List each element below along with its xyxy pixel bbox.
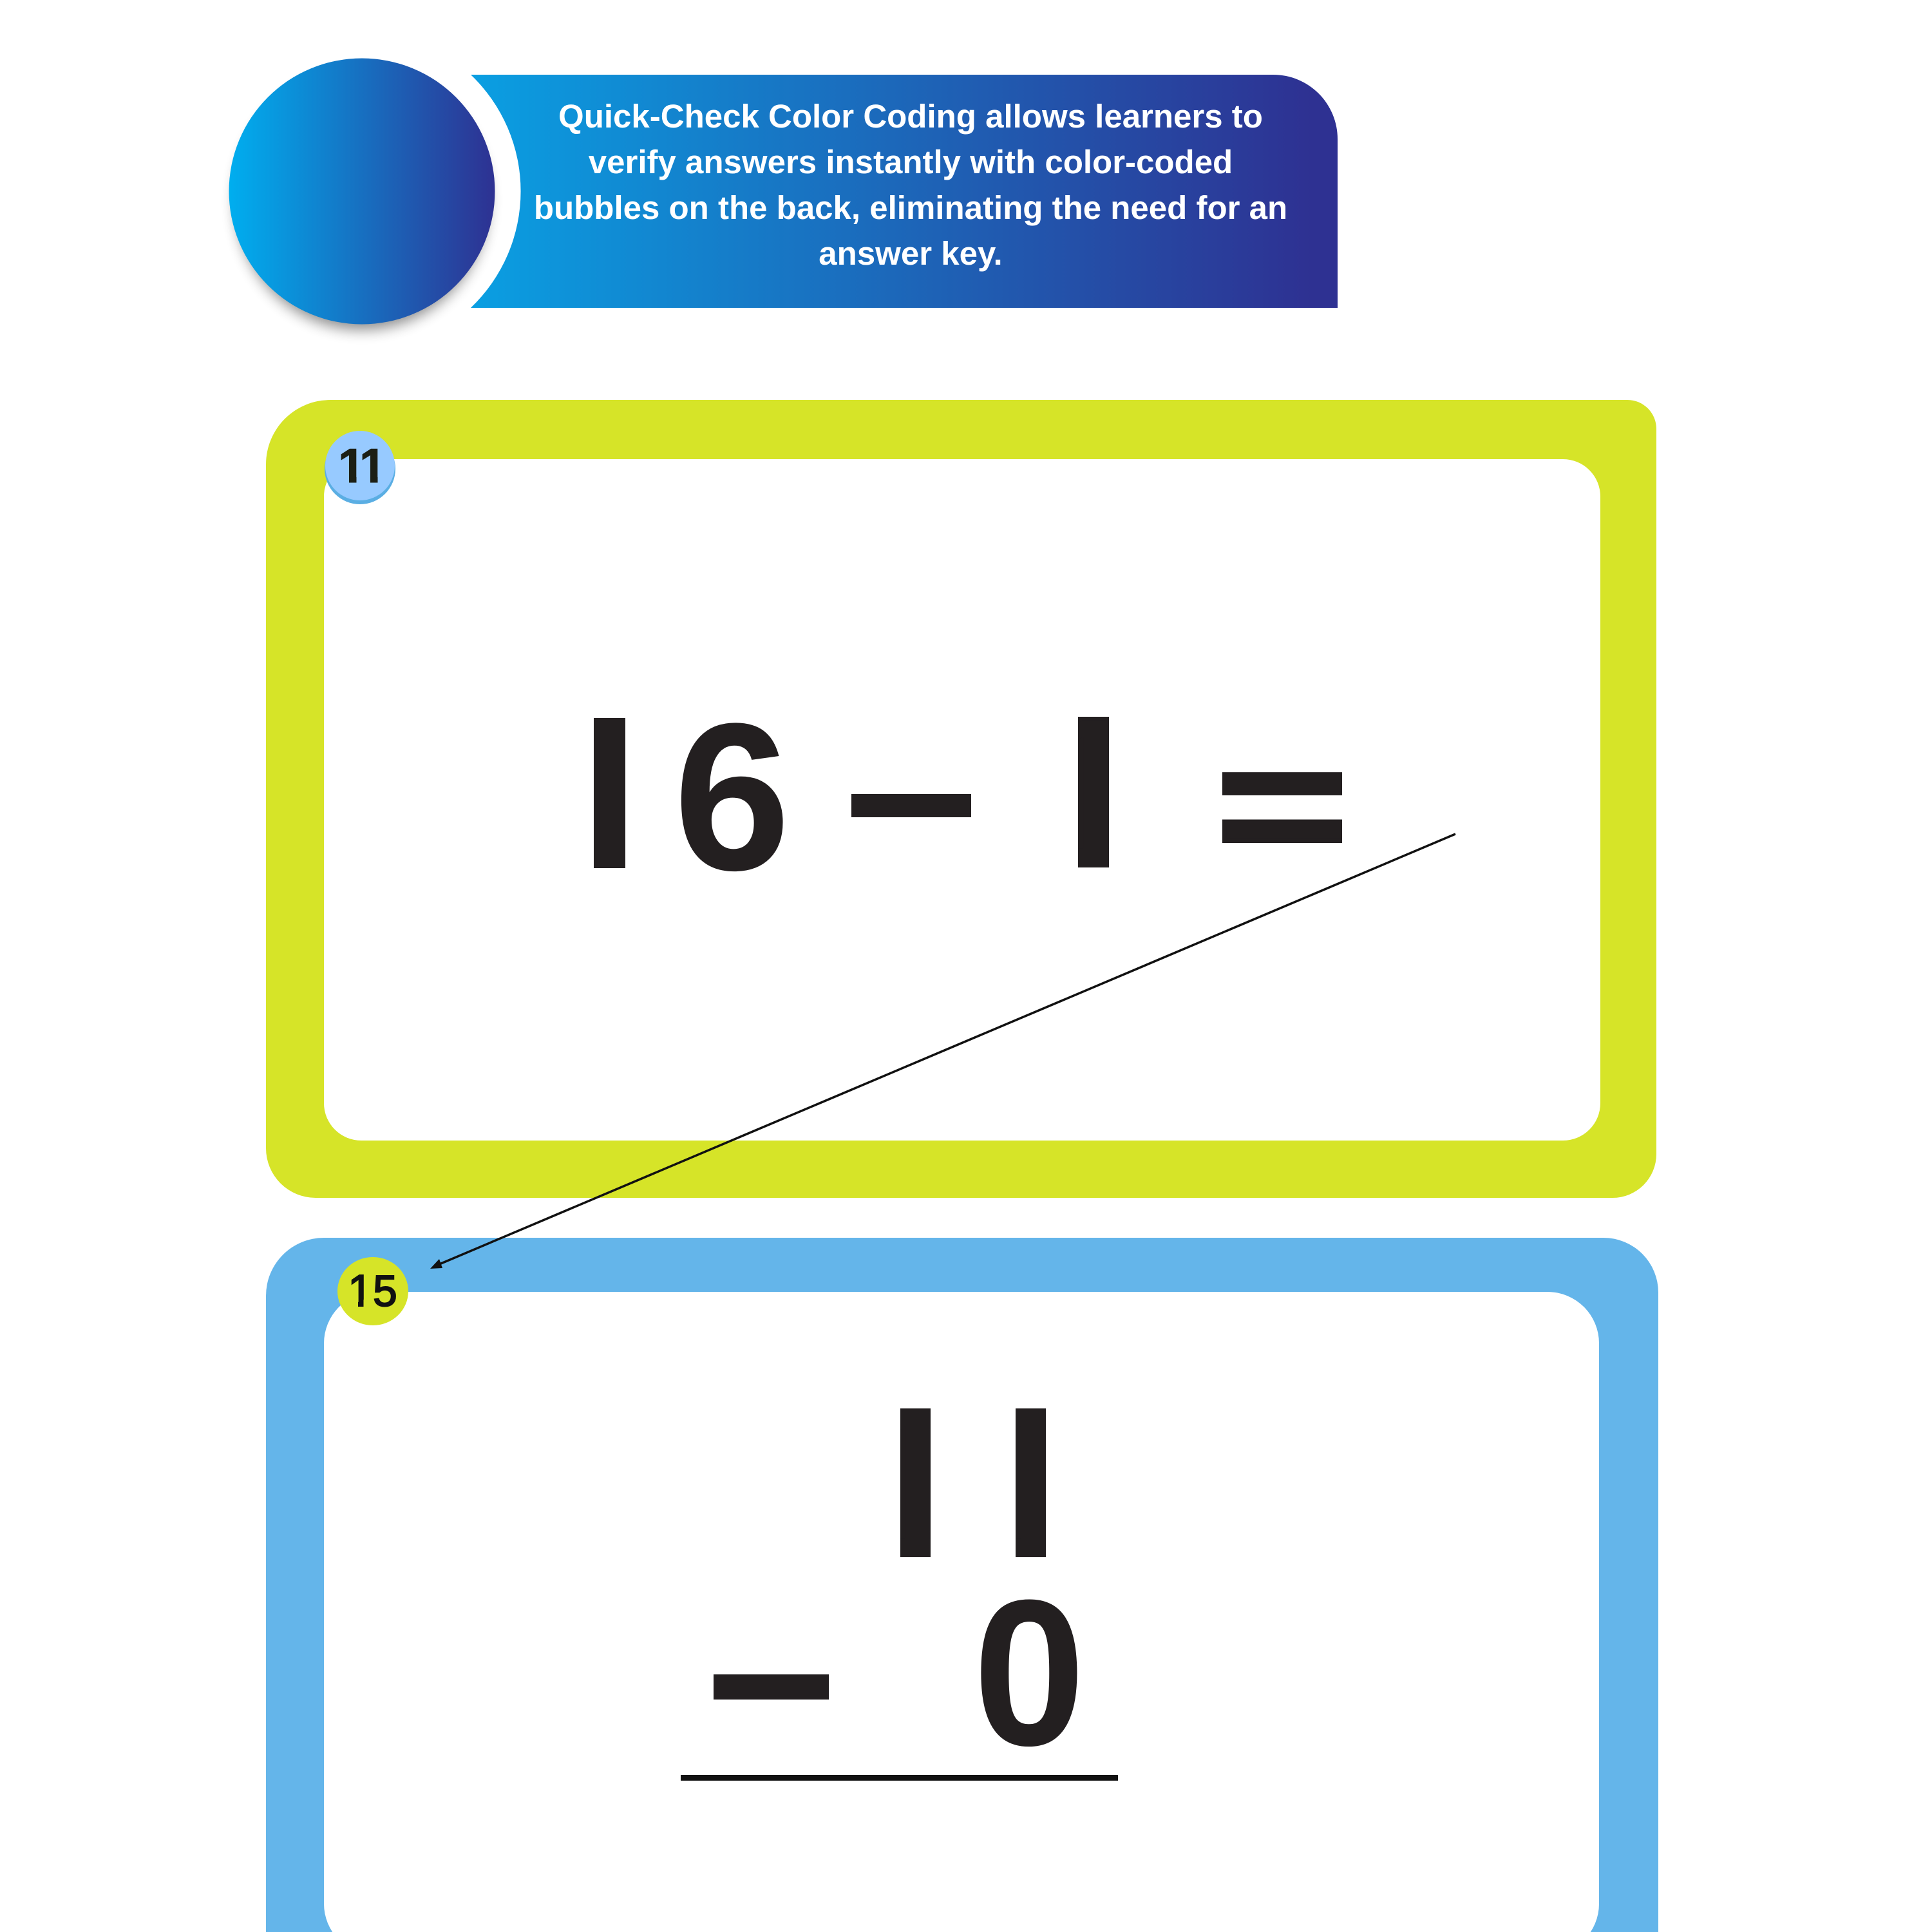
panel: blue flash card back [266, 1238, 1658, 1932]
equation: 16 - 1 =: = [1211, 708, 1361, 904]
callout text: Quick-Check Color Coding allows learners to [558, 98, 1263, 135]
vertical subtraction problem: 11 - 0 [681, 1408, 1118, 1781]
number badge 11: 1 [359, 439, 386, 493]
card inner face [324, 459, 1600, 1141]
answer line [681, 1775, 1118, 1781]
callout text: verify answers instantly with color-coded [589, 144, 1233, 180]
vertical subtraction problem: 11 - 0: 0 [973, 1557, 1085, 1789]
callout banner: quick-check color coding [229, 58, 1338, 330]
icon: gradient circle with shadow [229, 58, 495, 330]
equation: 16 - 1 =: − [837, 656, 988, 943]
equation: 16 - 1 = [545, 656, 1361, 943]
vertical subtraction problem: 11 - 0: 1 [851, 1359, 973, 1604]
equation: 16 - 1 =: 6 [674, 680, 790, 914]
card border [266, 1238, 1658, 1932]
card border [266, 400, 1656, 1198]
card inner face [324, 1292, 1599, 1932]
equation: 16 - 1 =: 1 [1029, 670, 1151, 914]
number badge 11: 1 [338, 439, 365, 493]
arrow: from equation to next card [430, 834, 1455, 1269]
number badge 15 [337, 1257, 408, 1325]
number badge 11 [325, 431, 395, 504]
banner ribbon [471, 75, 1338, 308]
equation: 16 - 1 =: 1 [545, 670, 667, 915]
vertical subtraction problem: 11 - 0: − [696, 1538, 846, 1826]
callout text: bubbles on the back, eliminating the need for an [534, 189, 1287, 226]
vertical subtraction problem: 11 - 0: 1 [967, 1359, 1088, 1604]
panel: green flash card front [266, 400, 1656, 1198]
number badge 15: 5 [373, 1267, 397, 1316]
callout text: answer key. [819, 235, 1003, 272]
number badge 15: 1 [348, 1265, 373, 1316]
